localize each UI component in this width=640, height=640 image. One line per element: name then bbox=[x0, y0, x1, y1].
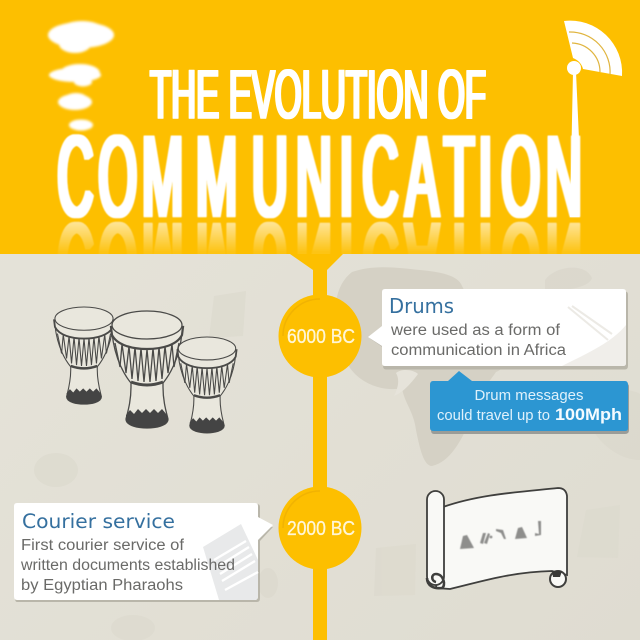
callout: drum speed: 100Mph bbox=[555, 405, 622, 424]
icon: left drum bbox=[54, 307, 114, 404]
icon: papyrus scroll bbox=[427, 488, 567, 589]
callout: Courier service: Courier service bbox=[22, 510, 175, 533]
icon: right drum bbox=[177, 337, 237, 433]
callout: drum speed: Drum messages bbox=[474, 387, 584, 404]
title line two: COMMUNICATION bbox=[57, 112, 582, 241]
title reflection: COMMUNICATION bbox=[57, 199, 582, 328]
ghost decorations bbox=[34, 291, 620, 640]
callout: Drums: were used as a form of bbox=[390, 322, 561, 339]
callout: Drums: communication in Africa bbox=[391, 342, 566, 359]
callout: Drums bbox=[368, 289, 628, 370]
timeline marker: 2000 BC: 2000 BC bbox=[287, 518, 355, 540]
callout: Courier service bbox=[14, 503, 273, 602]
icon: faint document bbox=[203, 524, 258, 600]
icon: three djembe drums bbox=[54, 307, 237, 433]
world map silhouette bbox=[335, 267, 640, 466]
callout: drum speed: could travel up to bbox=[437, 407, 550, 424]
callout: Drums: Drums bbox=[389, 294, 454, 318]
callout: Courier service: by Egyptian Pharaohs bbox=[21, 577, 183, 594]
header band bbox=[0, 0, 640, 270]
timeline line bbox=[313, 254, 327, 640]
timeline marker: 6000 BC: 6000 BC bbox=[287, 326, 355, 348]
icon: smoke signal clouds bbox=[48, 21, 114, 130]
callout: Courier service: First courier service of bbox=[21, 537, 185, 554]
timeline marker: 2000 BC bbox=[278, 486, 362, 570]
icon: antenna with signal waves bbox=[564, 21, 622, 217]
icon: centre drum bbox=[111, 311, 183, 428]
callout: drum speed bbox=[430, 371, 629, 434]
callout: Courier service: written documents established bbox=[20, 557, 235, 574]
icon: hieroglyphs bbox=[460, 521, 541, 549]
timeline marker: 6000 BC bbox=[278, 294, 362, 378]
